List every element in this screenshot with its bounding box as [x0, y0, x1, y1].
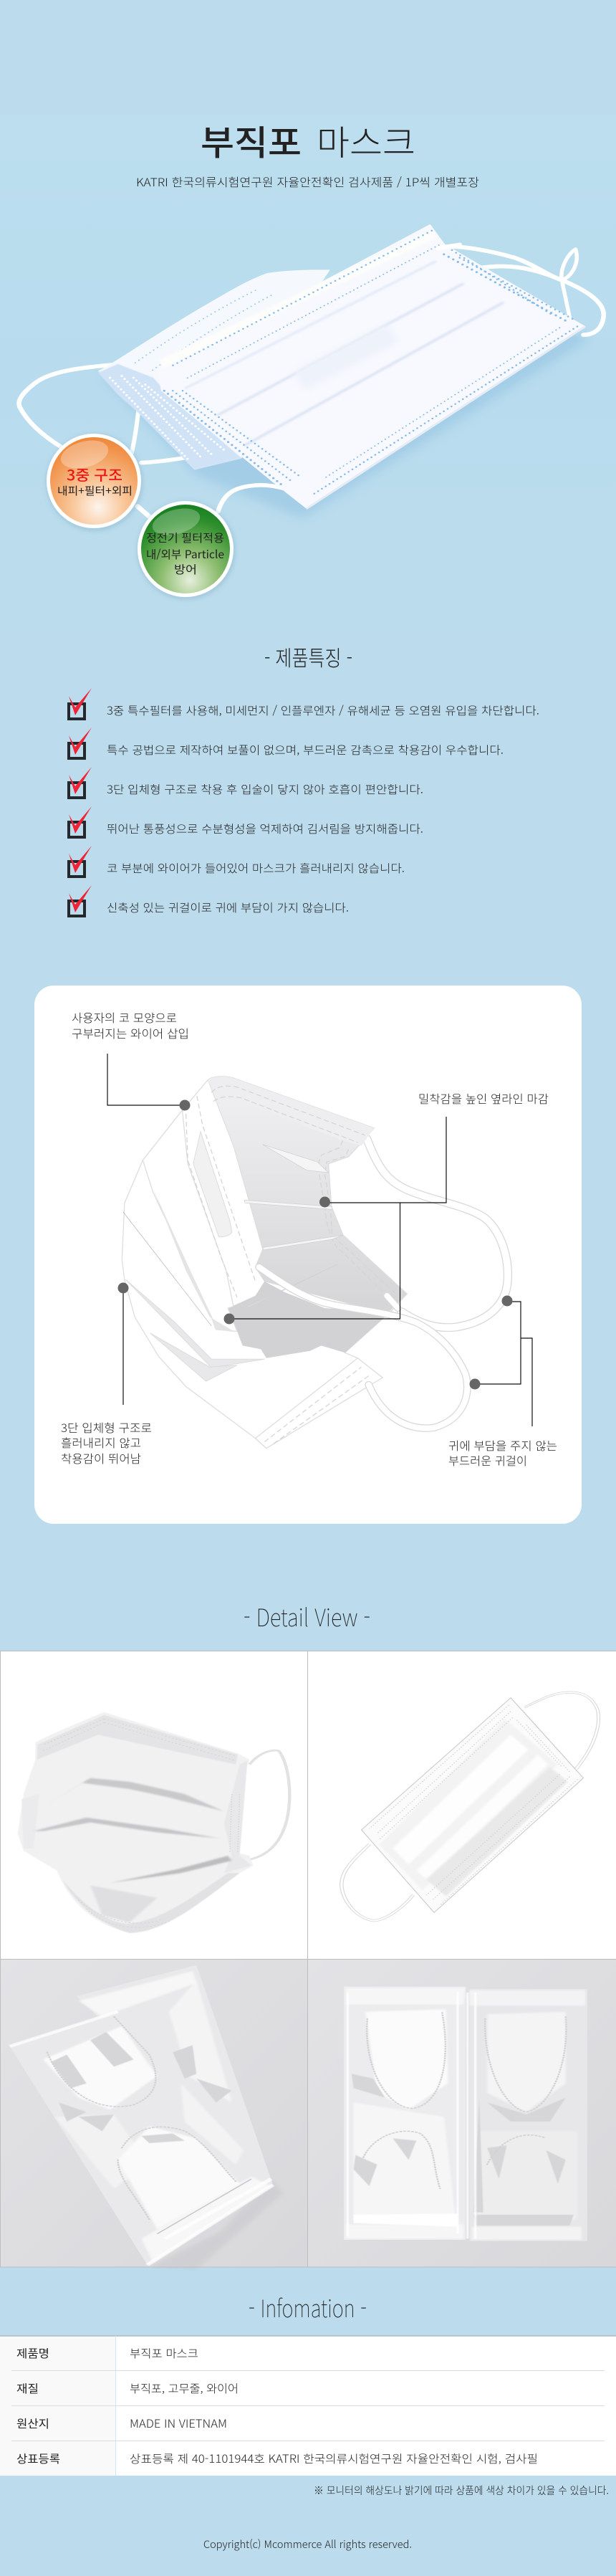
callout text: 3-fold: [61, 1418, 152, 1466]
front mask: [157, 224, 585, 509]
photo grid: [0, 1651, 616, 2270]
row: product name: 제품명: [16, 2345, 49, 2361]
photo: flat mask: [340, 1692, 600, 1922]
heading: detail view: - Detail View -: [244, 1598, 370, 1633]
row: product name: [16, 2345, 198, 2361]
feature 5: [69, 846, 405, 877]
feature 1: [69, 688, 539, 719]
feature 4: 뛰어난 통풍성으로 수분형성을 억제하여 김서림을 방지해줍니다.: [107, 821, 423, 836]
feature 4: [69, 806, 423, 837]
mask line drawing: [122, 1076, 512, 1449]
feature 2: 특수 공법으로 제작하여 보풀이 없으며, 부드러운 감촉으로 착용감이 우수합니다.: [107, 742, 504, 758]
row: material: 재질: [16, 2380, 39, 2396]
feature 5: 코 부분에 와이어가 들어있어 마스크가 흘러내리지 않습니다.: [107, 860, 405, 876]
panel: mask structure diagram: [34, 986, 582, 1524]
callout badge: 3-layer structure: [46, 434, 143, 531]
heading: product features: - 제품특징 -: [264, 641, 352, 672]
callout text: nose wire: 사용자의 코 모양으로: [72, 1008, 177, 1026]
callout badge: 3-layer structure: 3중 구조: [67, 464, 122, 485]
heading: information: - Infomation -: [249, 2289, 367, 2324]
callout lines: [107, 1054, 532, 1426]
back mask: [98, 269, 330, 469]
row: origin: MADE IN VIETNAM: [130, 2415, 227, 2431]
callout text: 3-fold: 흘러내리지 않고: [61, 1434, 141, 1451]
callout text: 3-fold: 착용감이 뛰어남: [61, 1449, 141, 1466]
callout text: side seam: 밀착감을 높인 옆라인 마감: [418, 1089, 549, 1107]
row: trademark: 상표등록: [16, 2451, 60, 2466]
mask shadow: [102, 285, 589, 518]
row: product name: 부직포 마스크: [130, 2345, 198, 2361]
photo: worn mask: [18, 1712, 291, 1934]
note: ※ 모니터의 해상도나 밝기에 따라 상품에 색상 차이가 있을 수 있습니다.: [314, 2483, 609, 2498]
callout badge: electrostatic filter: 내/외부 Particle: [146, 546, 224, 562]
back ear loops: [19, 247, 604, 518]
feature 2: [69, 728, 504, 758]
callout text: ear loop: [448, 1436, 557, 1469]
callout text: nose wire: 구부러지는 와이어 삽입: [72, 1024, 189, 1041]
callout badge: 3-layer structure: 내피+필터+외피: [57, 483, 133, 498]
info table: [0, 2336, 616, 2476]
feature 6: 신축성 있는 귀걸이로 귀에 부담이 가지 않습니다.: [107, 900, 349, 915]
callout text: ear loop: 부드러운 귀걸이: [448, 1451, 527, 1469]
copyright: Copyright(c) Mcommerce All rights reserved.: [203, 2537, 412, 2552]
subtitle: KATRI 한국의류시험연구원 자율안전확인 검사제품 / 1P씩 개별포장: [136, 173, 479, 190]
callout text: nose wire: [72, 1008, 189, 1041]
photo: packaged masks angled: [9, 1965, 278, 2269]
row: trademark: 상표등록 제 40-1101944호 KATRI 한국의류시험연구원 자율안전확인 시험, 검사필: [130, 2451, 538, 2466]
front mask pleats: [161, 234, 585, 509]
hero product photo: masks: [16, 224, 606, 519]
title: 부직포: [201, 115, 302, 165]
row: material: 부직포, 고무줄, 와이어: [130, 2380, 239, 2396]
title: 마스크: [317, 115, 415, 165]
front loop anchor: [438, 244, 460, 248]
feature 1: 3중 특수필터를 사용해, 미세먼지 / 인플루엔자 / 유해세균 등 오염원 유입을 차단합니다.: [107, 702, 539, 718]
callout text: 3-fold: 3단 입체형 구조로: [61, 1418, 152, 1436]
feature list: [69, 688, 539, 916]
photo: packaged masks side by side: [344, 1987, 587, 2241]
row: origin: 원산지: [16, 2415, 49, 2431]
callout badge: electrostatic filter: 방어: [174, 561, 197, 577]
row: material: [16, 2380, 239, 2396]
callout dots: [117, 1099, 513, 1389]
callout text: ear loop: 귀에 부담을 주지 않는: [448, 1436, 557, 1454]
feature 6: [69, 885, 349, 916]
title: [201, 115, 415, 165]
back mask dots: [110, 376, 226, 460]
callout badge: electrostatic filter: [137, 501, 236, 600]
callout badge: electrostatic filter: 정전기 필터적용: [146, 530, 224, 545]
row: origin: [16, 2415, 227, 2431]
feature 3: [69, 767, 423, 798]
front mask blue dots: [164, 231, 577, 494]
feature 3: 3단 입체형 구조로 착용 후 입술이 닿지 않아 호흡이 편안합니다.: [107, 781, 423, 797]
